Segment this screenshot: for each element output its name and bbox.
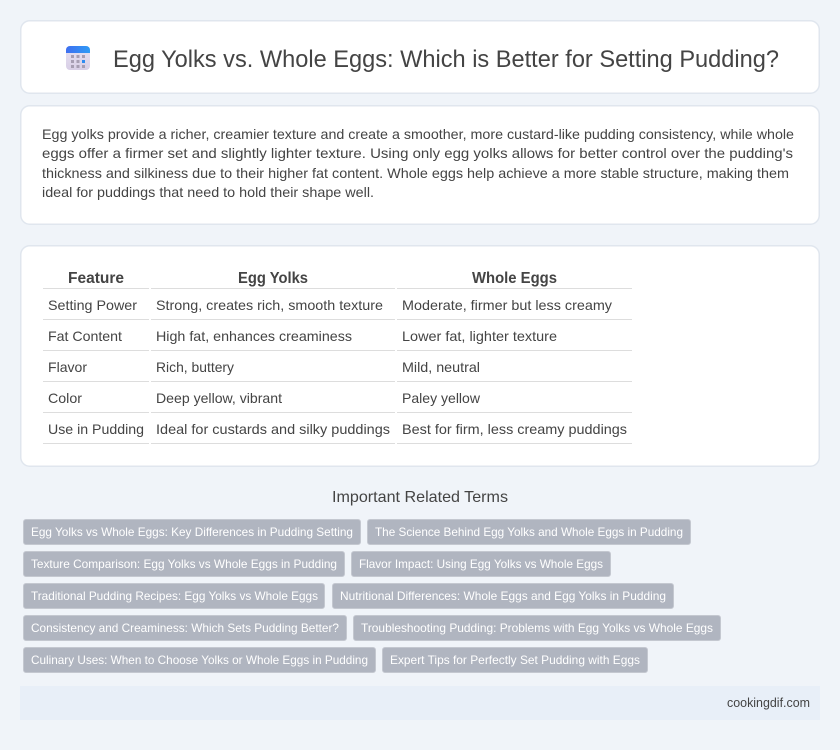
row: fat content: [48, 328, 557, 344]
tag: Troubleshooting Pudding: Problems with Egg Yolks vs Whole Eggs: [361, 621, 713, 635]
tag: Consistency and Creaminess: Which Sets Pudding Better?: [31, 621, 339, 635]
row: setting power: Strong, creates rich, smooth texture: [156, 297, 383, 313]
tag: [382, 648, 648, 672]
tag: Egg Yolks vs Whole Eggs: Key Differences in Pudding Setting: [31, 525, 353, 539]
row: color: Paley yellow: [402, 390, 481, 406]
row: flavor: [48, 359, 480, 375]
table header: [68, 270, 557, 287]
row: use in pudding: Best for firm, less creamy puddings: [402, 421, 627, 437]
row: flavor: Mild, neutral: [402, 359, 480, 375]
panel: introduction: [21, 106, 819, 224]
tag: [24, 520, 360, 544]
row: setting power: [48, 297, 612, 313]
row: flavor: Flavor: [48, 359, 87, 375]
row: color: Deep yellow, vibrant: [156, 390, 282, 406]
row: use in pudding: Use in Pudding: [48, 421, 144, 437]
tag: [332, 584, 674, 608]
related term tags: [24, 520, 720, 672]
row: flavor: Rich, buttery: [156, 359, 234, 375]
row: fat content: High fat, enhances creaminess: [156, 328, 352, 344]
table header: Whole Eggs: [472, 270, 557, 287]
table header: Feature: [68, 270, 124, 287]
tag: [354, 616, 720, 640]
row: fat content: Fat Content: [48, 328, 122, 344]
tag: [368, 520, 690, 544]
row: use in pudding: [48, 421, 627, 437]
tag: Nutritional Differences: Whole Eggs and Egg Yolks in Pudding: [340, 589, 666, 603]
tag: Flavor Impact: Using Egg Yolks vs Whole Eggs: [359, 557, 603, 571]
row: fat content: Lower fat, lighter texture: [402, 328, 557, 344]
tag: Culinary Uses: When to Choose Yolks or Whole Eggs in Pudding: [31, 653, 368, 667]
icon: calendar: [66, 46, 90, 70]
tag: Traditional Pudding Recipes: Egg Yolks vs Whole Eggs: [31, 589, 318, 603]
row: setting power: Setting Power: [48, 297, 137, 313]
tag: Texture Comparison: Egg Yolks vs Whole Eggs in Pudding: [31, 557, 337, 571]
heading: related terms: Important Related Terms: [332, 489, 508, 506]
tag: The Science Behind Egg Yolks and Whole Eggs in Pudding: [375, 525, 683, 539]
panel: title header: [21, 21, 819, 93]
table header: Egg Yolks: [238, 270, 308, 287]
title: Egg Yolks vs. Whole Eggs: Which is Better for Setting Pudding?: [113, 46, 779, 73]
footer: [20, 686, 820, 720]
tag: Expert Tips for Perfectly Set Pudding with Eggs: [390, 653, 640, 667]
intro text: ideal for puddings that need to hold their shape well.: [42, 184, 374, 200]
footer source: cookingdif.com: [727, 696, 810, 710]
tag: [24, 648, 376, 672]
tag: [352, 552, 610, 576]
tag: [24, 584, 324, 608]
intro text: Egg yolks provide a richer, creamier texture and create a smoother, more custard-like pudding consistency, while whole: [42, 126, 794, 142]
row: color: [48, 390, 481, 406]
row: color: Color: [48, 390, 82, 406]
intro text: eggs offer a firmer set and slightly lighter texture. Using only egg yolks allows for better control over the pudding's: [42, 145, 793, 161]
tag: [24, 552, 344, 576]
tag: [24, 616, 346, 640]
intro text: [42, 126, 794, 200]
row: use in pudding: Ideal for custards and silky puddings: [156, 421, 390, 437]
row: setting power: Moderate, firmer but less creamy: [402, 297, 612, 313]
intro text: thickness and silkiness due to their higher fat content. Whole eggs help achieve a more stable structure, making them: [42, 165, 789, 181]
panel: comparison table: [21, 246, 819, 466]
